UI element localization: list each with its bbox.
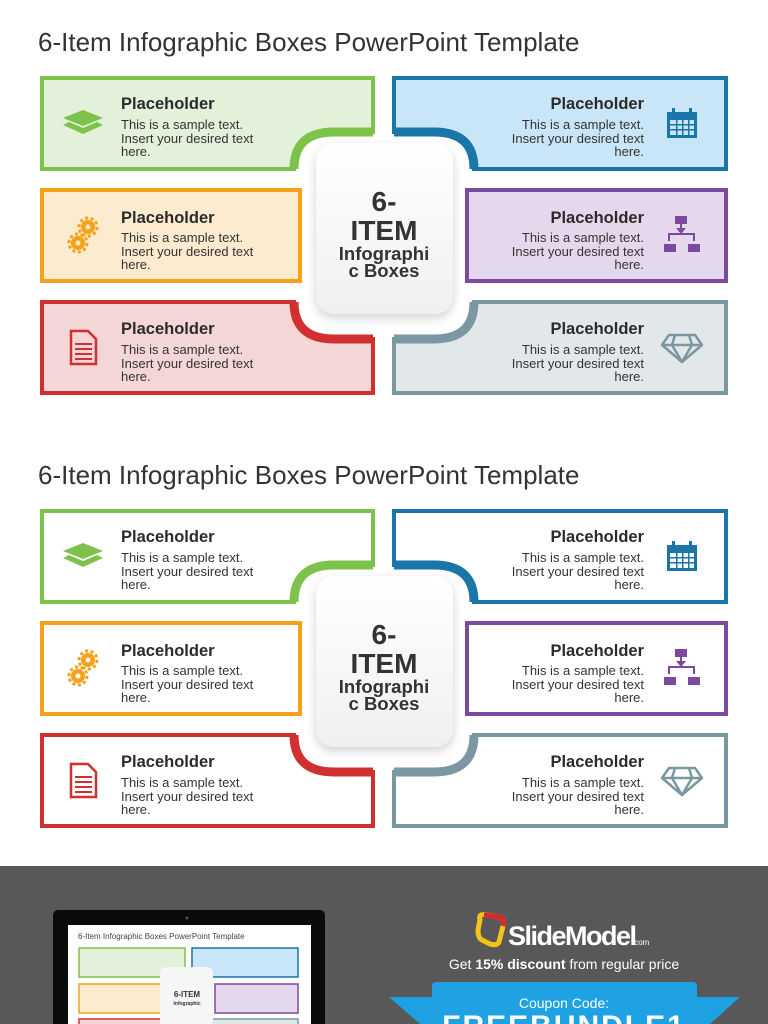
- center card: Infographi: [339, 243, 429, 264]
- panel: blue outline: [394, 511, 726, 602]
- panel: purple outline: here.: [614, 690, 644, 705]
- panel: red bottom-left: Placeholder: [121, 320, 215, 338]
- panel: gray outline: Placeholder: [550, 753, 645, 771]
- logo: SlideModel: SlideModel: [508, 921, 636, 951]
- panel: gray outline: here.: [614, 802, 644, 817]
- panel: gray bottom-right: here.: [614, 369, 644, 384]
- coupon ribbon: [389, 982, 740, 1024]
- title 2: 6-Item Infographic Boxes PowerPoint Template: [38, 460, 579, 490]
- icon: diamond: [662, 335, 702, 362]
- panel: red bottom-left: here.: [121, 369, 151, 384]
- panel: purple outline: This is a sample text.: [522, 663, 644, 678]
- panel: purple middle-right: [467, 190, 726, 281]
- center card 2: ITEM: [351, 648, 417, 679]
- panel: red outline: here.: [121, 802, 151, 817]
- panel: green top-left: This is a sample text.: [121, 117, 243, 132]
- panel: orange middle-left: This is a sample text.: [121, 230, 243, 245]
- panel: green top-left: here.: [121, 144, 151, 159]
- laptop mockup: 6-ITEM: [174, 990, 200, 999]
- center card: ITEM: [351, 215, 417, 246]
- panel: red bottom-left: Insert your desired text: [121, 356, 254, 371]
- laptop mockup: [53, 910, 325, 1024]
- panel: gray outline: This is a sample text.: [522, 775, 644, 790]
- center card: 6-: [372, 186, 396, 217]
- laptop mockup: Infographic: [173, 1001, 201, 1007]
- panel: green outline: [42, 511, 373, 602]
- panel: green top-left: Placeholder: [121, 95, 215, 113]
- panel: orange outline: This is a sample text.: [121, 663, 243, 678]
- panel: red outline: This is a sample text.: [121, 775, 243, 790]
- icon: gears: [69, 651, 97, 685]
- panel: red outline: Insert your desired text: [121, 789, 254, 804]
- center card 2: 6-: [372, 619, 396, 650]
- panel: blue outline: Insert your desired text: [512, 564, 644, 579]
- panel: gray bottom-right: This is a sample text.: [522, 342, 644, 357]
- panel: blue outline: here.: [614, 577, 644, 592]
- panel: red outline: Placeholder: [121, 753, 215, 771]
- panel: blue outline: This is a sample text.: [522, 550, 644, 565]
- panel: green outline: Placeholder: [121, 528, 215, 546]
- icon: hierarchy: [664, 649, 700, 685]
- center card 2: [316, 576, 453, 747]
- panel: gray bottom-right: Insert your desired text: [512, 356, 644, 371]
- panel: blue top-right: [394, 78, 726, 169]
- panel: orange outline: here.: [121, 690, 151, 705]
- icon: document: [71, 331, 96, 364]
- panel: gray bottom-right: Placeholder: [550, 320, 645, 338]
- center card: c Boxes: [349, 260, 419, 281]
- panel: blue outline: Placeholder: [550, 528, 645, 546]
- panel: green top-left: Insert your desired text: [121, 131, 254, 146]
- panel: purple outline: Placeholder: [550, 642, 645, 660]
- section 2: outline infographic: [38, 460, 726, 826]
- icon: hierarchy: [664, 216, 700, 252]
- panel: orange middle-left: here.: [121, 257, 151, 272]
- panel: orange outline: Placeholder: [121, 642, 215, 660]
- center card: [316, 143, 453, 314]
- panel: orange middle-left: Placeholder: [121, 209, 215, 227]
- panel: purple outline: [467, 623, 726, 714]
- panel: gray outline: [394, 735, 726, 826]
- center card 2: Infographi: [339, 676, 429, 697]
- panel: green outline: This is a sample text.: [121, 550, 243, 565]
- panel: green outline: here.: [121, 577, 151, 592]
- icon: calendar: [667, 108, 697, 138]
- center card 2: c Boxes: [349, 693, 419, 714]
- icon: layers: [63, 110, 103, 134]
- coupon ribbon: Coupon Code:: [519, 995, 609, 1011]
- panel: red bottom-left: This is a sample text.: [121, 342, 243, 357]
- panel: gray bottom-right: [394, 302, 726, 393]
- icon: calendar: [667, 541, 697, 571]
- panel: red bottom-left: [42, 302, 373, 393]
- panel: blue top-right: This is a sample text.: [522, 117, 644, 132]
- icon: diamond: [662, 768, 702, 795]
- panel: green outline: Insert your desired text: [121, 564, 254, 579]
- panel: orange outline: Insert your desired text: [121, 677, 254, 692]
- icon: layers: [63, 543, 103, 567]
- panel: purple middle-right: Insert your desired text: [512, 244, 644, 259]
- icon: document: [71, 764, 96, 797]
- panel: orange outline: [42, 623, 300, 714]
- promo banner: [0, 866, 768, 1024]
- icon: gears: [69, 218, 97, 252]
- panel: red outline: [42, 735, 373, 826]
- title 1: 6-Item Infographic Boxes PowerPoint Template: [38, 27, 579, 57]
- panel: orange middle-left: Insert your desired text: [121, 244, 254, 259]
- panel: green top-left: [42, 78, 373, 169]
- laptop mockup: 6-Item Infographic Boxes PowerPoint Template: [78, 932, 245, 941]
- logo: SlideModel: .com: [632, 938, 650, 947]
- panel: blue top-right: Placeholder: [550, 95, 645, 113]
- panel: purple middle-right: here.: [614, 257, 644, 272]
- panel: purple middle-right: Placeholder: [550, 209, 645, 227]
- panel: blue top-right: Insert your desired text: [512, 131, 644, 146]
- panel: purple middle-right: This is a sample text.: [522, 230, 644, 245]
- section 1: colored infographic: [38, 27, 726, 393]
- panel: blue top-right: here.: [614, 144, 644, 159]
- logo: SlideModel: [478, 915, 650, 951]
- panel: purple outline: Insert your desired text: [512, 677, 644, 692]
- discount text: Get 15% discount from regular price: [449, 956, 679, 972]
- panel: gray outline: Insert your desired text: [512, 789, 644, 804]
- panel: orange middle-left: [42, 190, 300, 281]
